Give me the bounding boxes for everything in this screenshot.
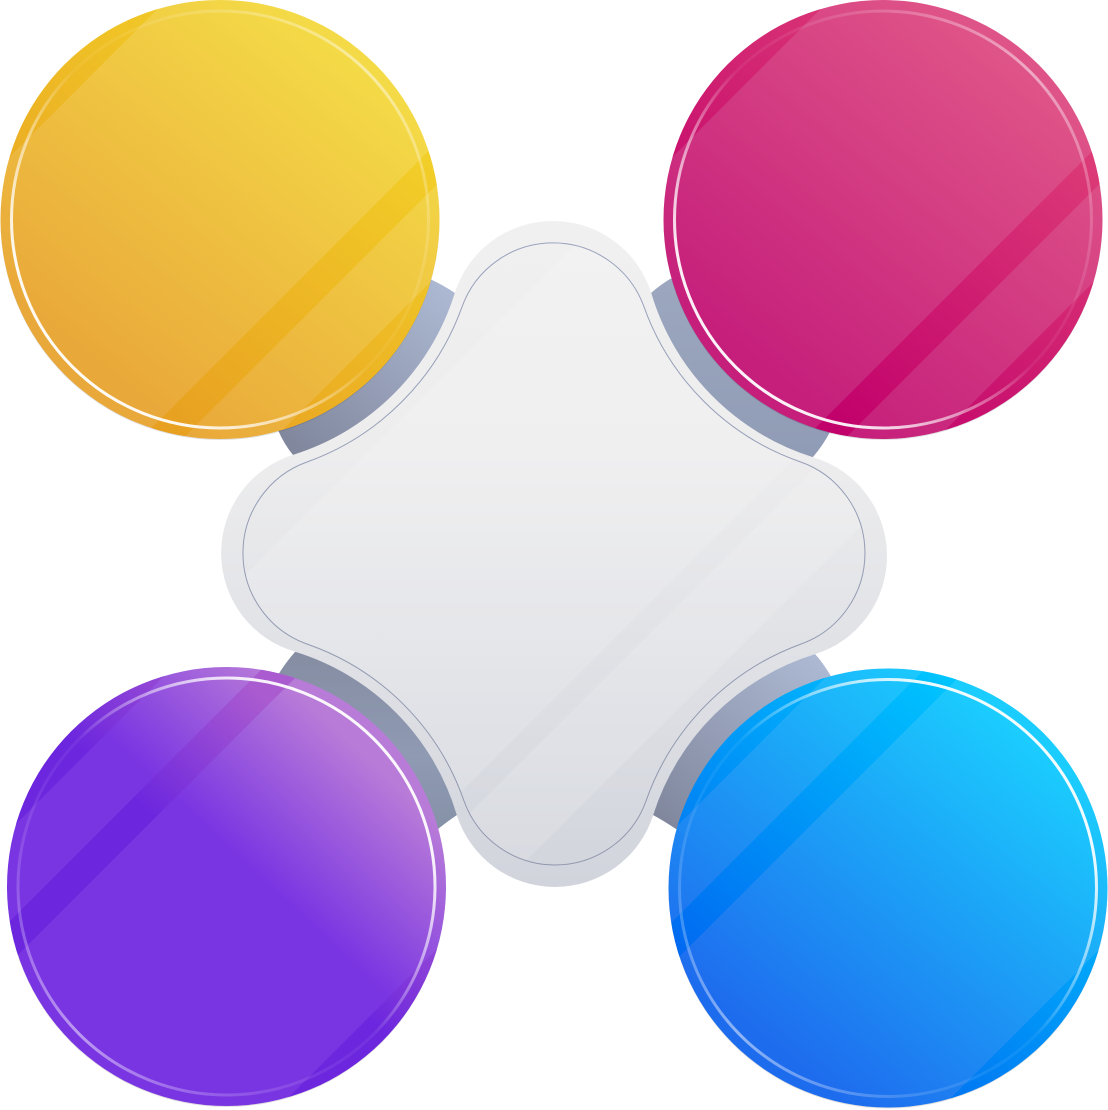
connector arc: bottom right xyxy=(630,630,888,888)
purple stripes xyxy=(6,666,446,1106)
yellow ring xyxy=(12,11,428,428)
connector arc: top left xyxy=(220,220,480,480)
pink ring xyxy=(674,11,1092,428)
blue stripes xyxy=(668,668,1108,1108)
circle: purple xyxy=(6,666,446,1107)
circle: pink xyxy=(663,0,1103,440)
blue ring xyxy=(680,680,1096,1096)
circle: blue xyxy=(668,668,1108,1108)
pink stripes xyxy=(663,0,1103,440)
connector arc: top right xyxy=(630,220,883,480)
yellow stripes xyxy=(0,0,440,440)
purple ring xyxy=(18,678,435,1095)
circle: yellow xyxy=(0,0,440,440)
connector arc: bottom left xyxy=(226,630,480,886)
central panel outline xyxy=(243,243,865,865)
central rounded cross panel xyxy=(221,221,887,887)
